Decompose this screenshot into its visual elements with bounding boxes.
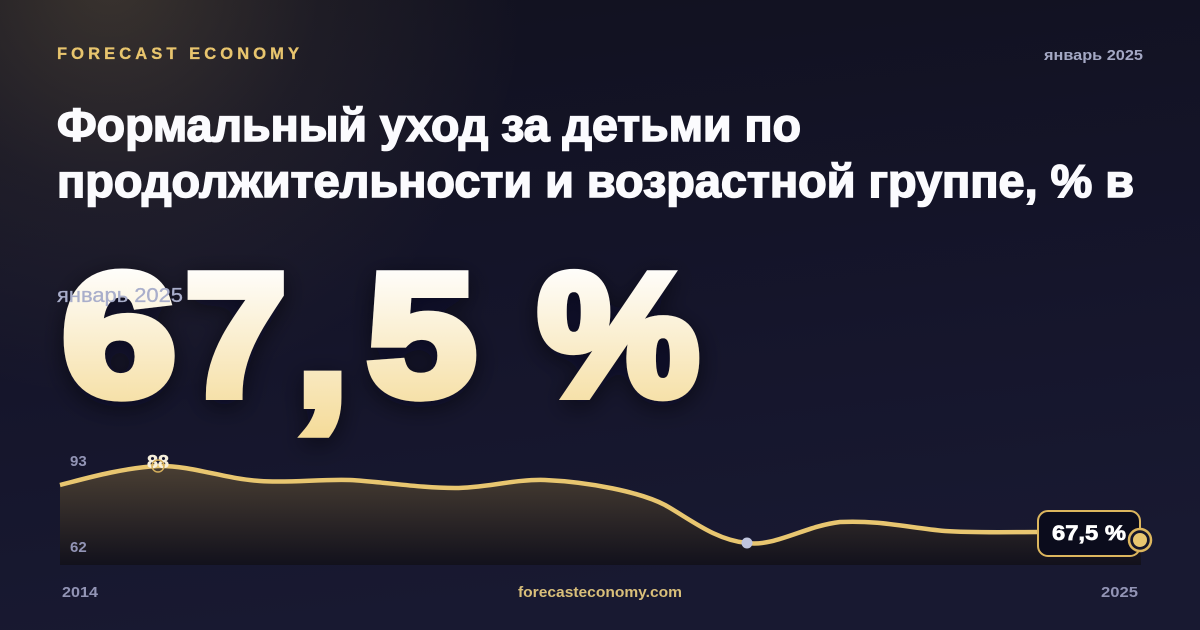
big value <box>62 235 699 443</box>
date subtitle over value: январь 2025 <box>57 285 183 307</box>
peak marker <box>152 460 164 472</box>
big value: 5 <box>367 238 476 433</box>
big value: , <box>296 235 349 443</box>
source url: forecasteconomy.com <box>518 585 682 601</box>
title <box>57 99 1134 207</box>
big value: % <box>538 237 699 432</box>
chart area fill <box>60 466 1141 565</box>
axis start year: 2014 <box>62 585 98 601</box>
callout: current value: 67,5 % <box>1052 522 1126 545</box>
big value: 7 <box>185 237 287 432</box>
axis min label: 62 <box>70 539 87 556</box>
axis end year: 2025 <box>1101 585 1138 601</box>
end marker <box>1129 529 1151 551</box>
date top right: январь 2025 <box>1044 47 1143 64</box>
title: продолжительности и возрастной группе, % в <box>57 155 1134 207</box>
axis max label: 93 <box>70 453 87 470</box>
big value: 6 <box>62 239 176 432</box>
callout: current value <box>1038 511 1140 556</box>
low marker <box>742 538 752 548</box>
chart line <box>60 466 1040 544</box>
title: Формальный уход за детьми по <box>57 99 801 151</box>
peak value label: 88 <box>147 452 169 472</box>
area chart <box>60 452 1151 565</box>
brand label: FORECAST ECONOMY <box>57 45 299 63</box>
